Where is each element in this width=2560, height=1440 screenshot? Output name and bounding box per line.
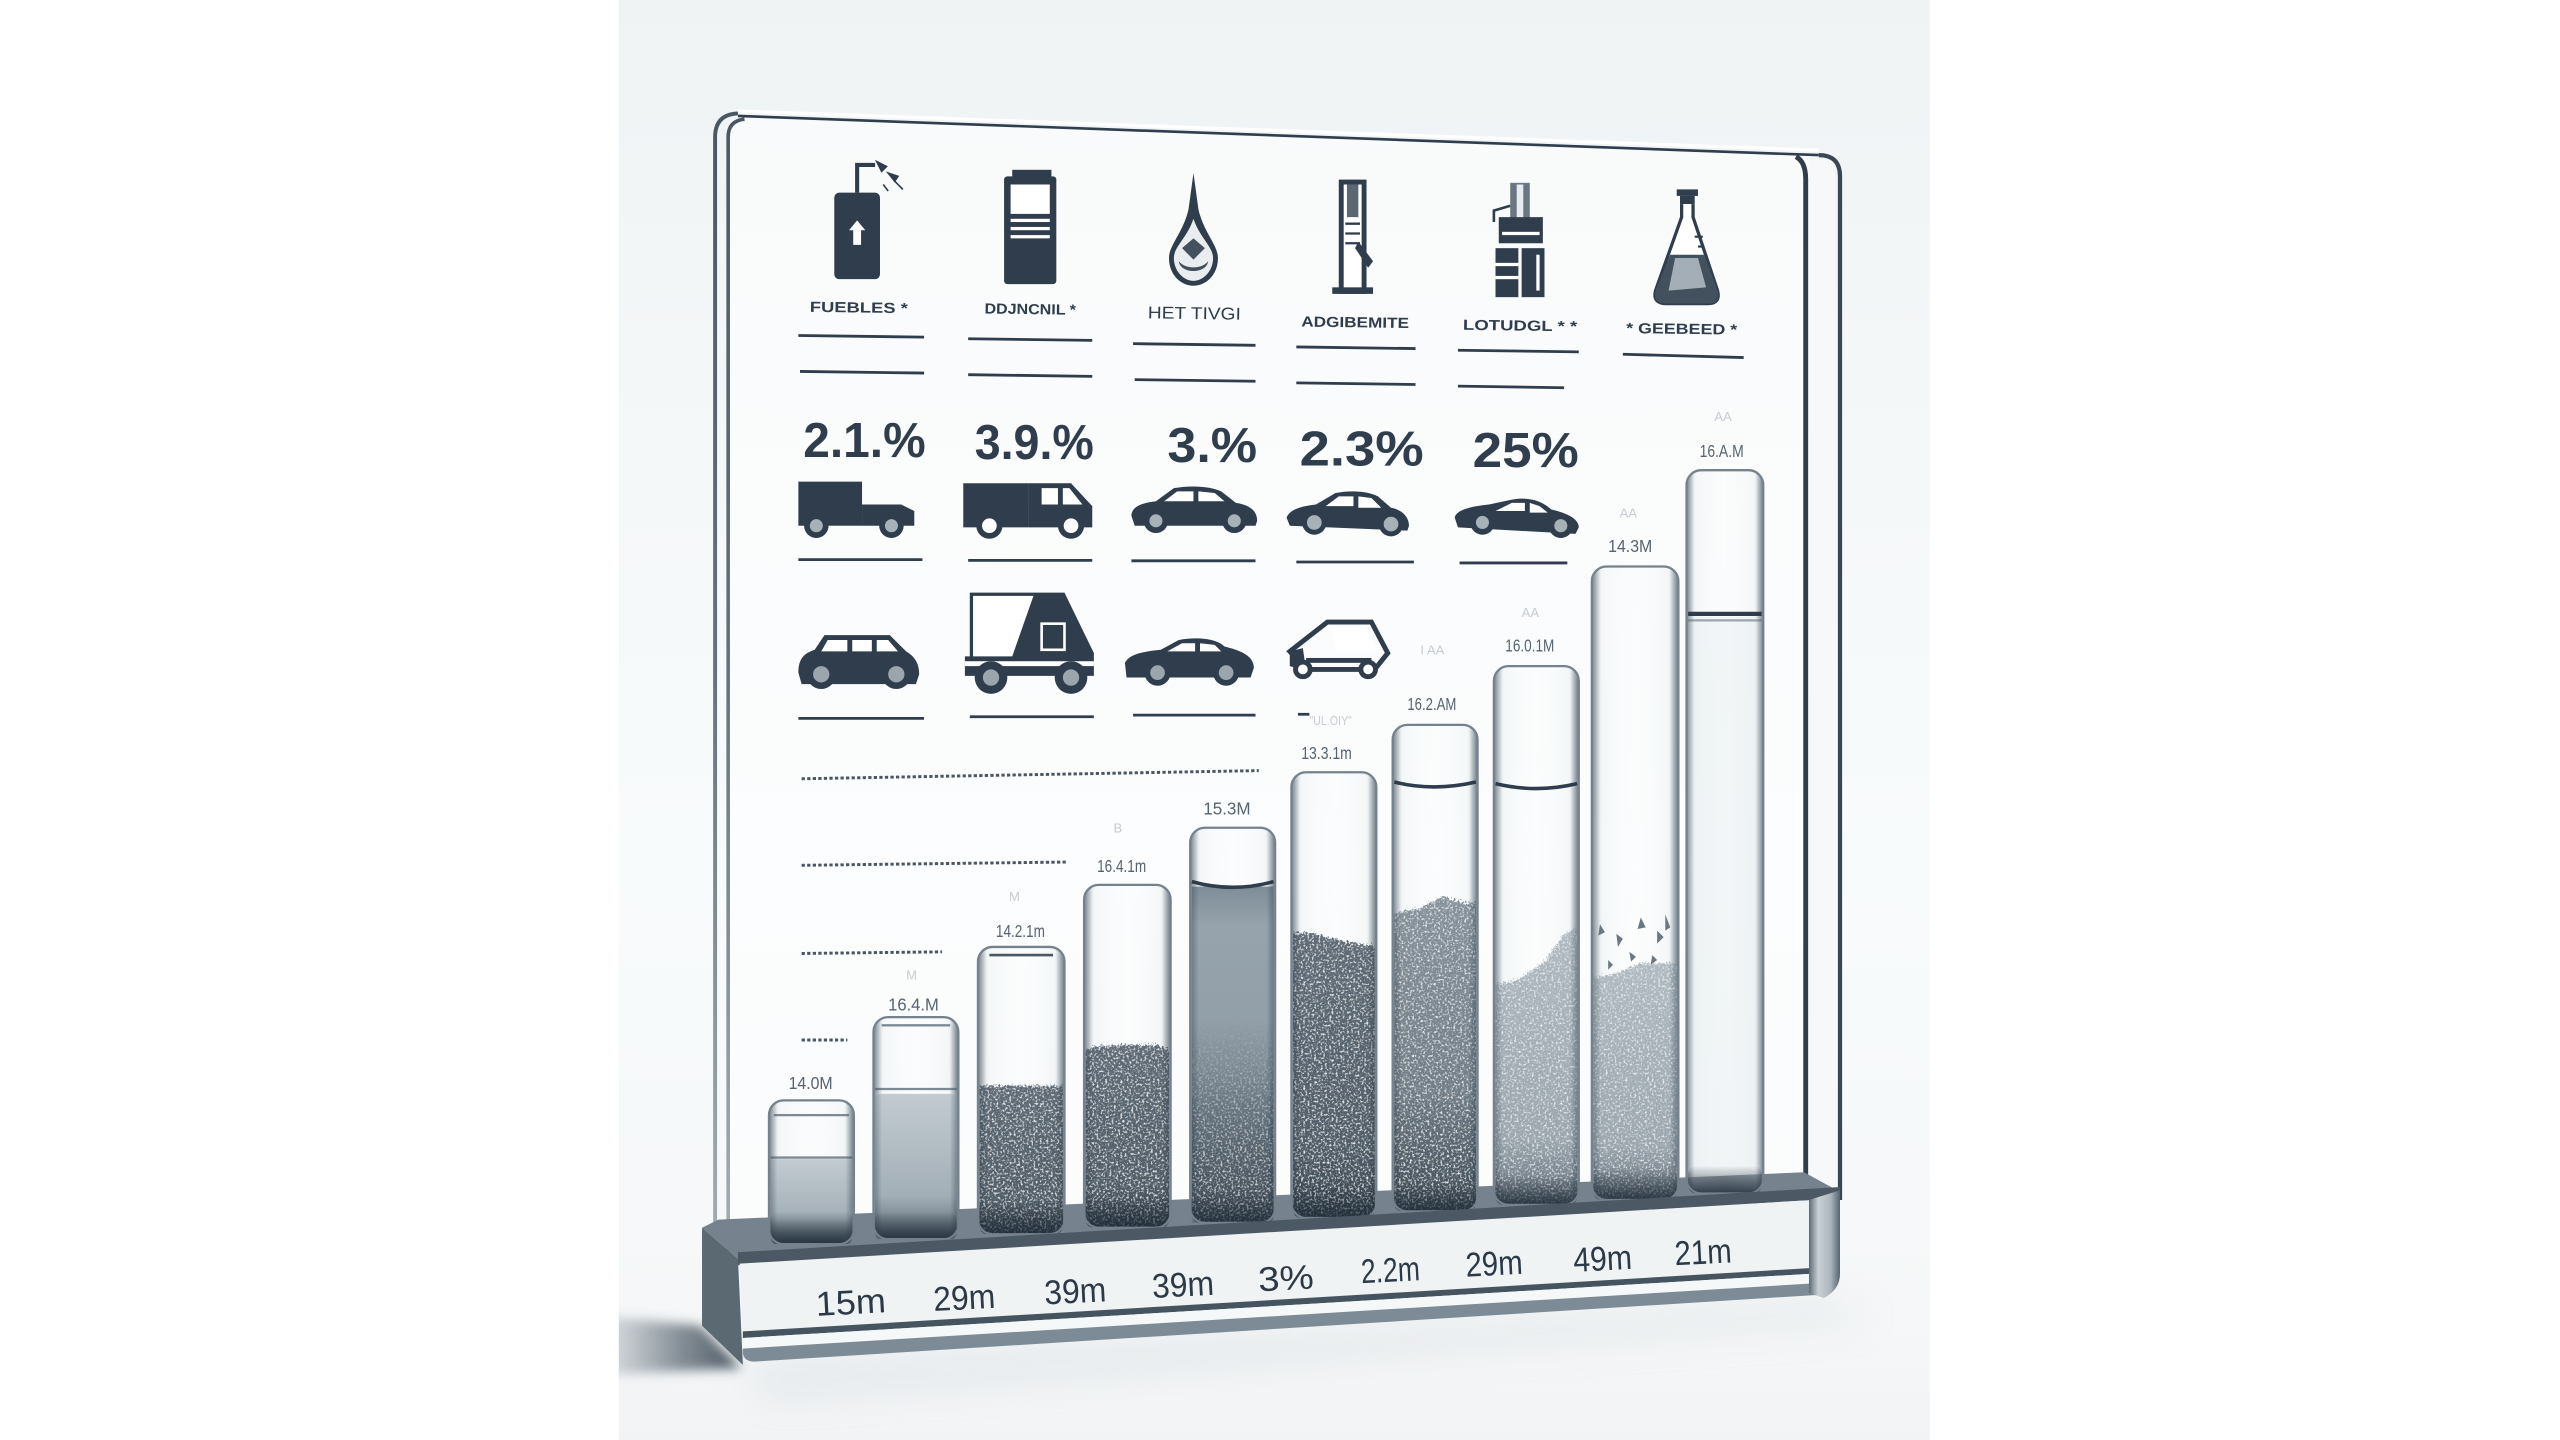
tube 4 xyxy=(1078,885,1176,1234)
tube value labels: AA xyxy=(1522,605,1539,620)
icon: fuel pump xyxy=(1332,180,1373,294)
tube value labels: 14.2.1m xyxy=(996,921,1045,941)
base distance labels: 2.2m xyxy=(1360,1250,1421,1291)
label: fuebles: FUEBLES * xyxy=(810,300,908,317)
base: left end xyxy=(702,1228,743,1365)
icon: box truck xyxy=(798,482,914,538)
base: top dark edge xyxy=(738,1187,1840,1265)
background panel xyxy=(619,0,1930,1440)
dotted guide lines xyxy=(802,771,1259,1040)
tubes xyxy=(769,470,1763,1244)
base: lower strips xyxy=(743,1268,1816,1338)
tube value labels: 13.3.1m xyxy=(1301,743,1352,763)
label: het tivgi: HET TIVGI xyxy=(1148,302,1241,324)
base distance labels: 49m xyxy=(1572,1239,1633,1280)
tube 7 xyxy=(1392,724,1479,1212)
floor shadow xyxy=(618,1313,1690,1392)
vehicle row 2 xyxy=(798,593,1388,694)
tube 2 xyxy=(873,1017,958,1239)
icon: sedan xyxy=(1131,486,1257,533)
tube 5 xyxy=(1185,828,1280,1229)
icon: flask xyxy=(1655,189,1718,304)
percent values: 3.9.% xyxy=(975,416,1094,470)
tube value labels: 14.0M xyxy=(789,1073,833,1093)
base: right end xyxy=(1809,1190,1840,1298)
icon: coupe xyxy=(1455,499,1579,538)
icon: oil drop xyxy=(1169,173,1218,286)
icon: low sports car xyxy=(1125,638,1254,686)
icon: sports sedan xyxy=(1287,491,1409,536)
tube 9 xyxy=(1590,565,1680,1200)
label: geebeed: * GEEBEED * xyxy=(1626,321,1738,339)
tube 6 xyxy=(1290,771,1378,1218)
base distance labels: 21m xyxy=(1674,1232,1733,1273)
base bar xyxy=(702,1187,1840,1365)
tube value labels: 16.4.M xyxy=(888,995,939,1015)
base distance labels: 29m xyxy=(1465,1244,1524,1285)
base: top surface behind tubes xyxy=(702,1172,1840,1259)
percent values xyxy=(803,414,1579,478)
percent values: 2.3% xyxy=(1300,422,1424,476)
icon: battery xyxy=(1004,170,1056,284)
base distance labels: 3% xyxy=(1257,1259,1315,1299)
row 2 divider lines xyxy=(798,714,1309,718)
label: lotudgl: LOTUDGL * * xyxy=(1463,318,1578,335)
base distance labels: 39m xyxy=(1043,1271,1107,1312)
vehicle row 1 xyxy=(798,482,1579,539)
tube value labels: 16.0.1M xyxy=(1505,635,1554,655)
header divider lines xyxy=(798,336,1744,388)
tube 1 xyxy=(769,1100,854,1244)
tube value labels: 16.2.AM xyxy=(1407,694,1456,714)
label: ddjncnil: DDJNCNIL * xyxy=(984,301,1076,319)
percent values: 2.1.% xyxy=(803,414,926,468)
base distance labels: 39m xyxy=(1151,1265,1215,1306)
base: label strip xyxy=(740,1200,1812,1334)
tube value labels: M xyxy=(1009,889,1020,904)
tube value labels: M xyxy=(906,968,917,983)
base distance labels: 15m xyxy=(815,1282,887,1324)
tube value labels: B xyxy=(1113,821,1122,836)
column headers xyxy=(810,162,1738,339)
tube value labels: I AA xyxy=(1420,643,1445,658)
tube value labels: 16.4.1m xyxy=(1097,856,1146,876)
icon: van truck xyxy=(963,483,1092,539)
tube 3 xyxy=(976,946,1066,1234)
tube 8 xyxy=(1492,665,1580,1205)
tube value labels: 14.3M xyxy=(1608,536,1652,556)
row 1 divider lines xyxy=(798,560,1567,563)
tube value labels: "UL.OIY" xyxy=(1309,713,1352,728)
percent values: 3.% xyxy=(1167,419,1257,473)
base distance labels: 29m xyxy=(932,1278,996,1319)
icon: spray bottle xyxy=(834,162,903,279)
icon: cylinder canister xyxy=(1494,183,1544,297)
icon: large truck xyxy=(965,593,1094,694)
base distance labels xyxy=(815,1232,1733,1324)
icon: small utility cart xyxy=(1290,622,1388,679)
tube value labels: 16.A.M xyxy=(1700,441,1744,461)
tube value labels: AA xyxy=(1620,506,1637,521)
tube 10 xyxy=(1687,470,1763,1193)
glass back panel xyxy=(715,111,1840,1257)
label: adgibemite: ADGIBEMITE xyxy=(1301,315,1409,332)
tube value labels xyxy=(789,409,1744,1093)
icon: hatchback xyxy=(798,635,919,689)
percent values: 25% xyxy=(1473,424,1579,478)
tube value labels: 15.3M xyxy=(1203,799,1251,819)
tube value labels: AA xyxy=(1714,409,1732,424)
